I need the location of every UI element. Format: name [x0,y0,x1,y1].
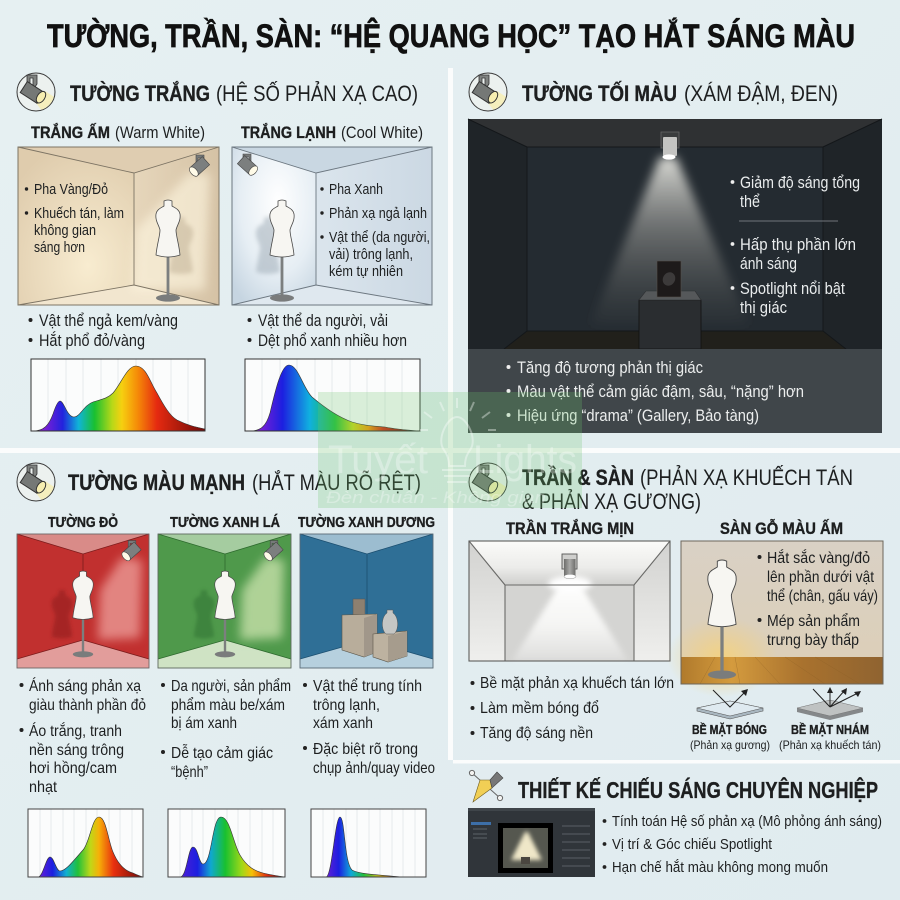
text: cool notes: Dệt phổ xanh nhiều hơn [258,331,407,350]
text: lighting design notes: Hạn chế hắt màu không mong muốn [612,859,828,876]
heading: strong coloured walls: TƯỜNG MÀU MẠNH [68,470,245,495]
chart: blue spectrum [311,809,426,877]
room: wood floor [667,541,883,697]
room: warm white: Pha Vàng/Đỏ [34,181,108,198]
room: warm white: không gian [34,222,96,239]
text: cool notes [248,311,407,350]
watermark [318,392,582,508]
text: warm notes: Vật thể ngả kem/vàng [39,311,178,330]
room: wood floor: Mép sản phẩm [767,612,860,630]
text: lighting design notes [603,813,882,876]
text: blue wall notes: chụp ảnh/quay video [313,760,435,777]
text: warm notes [28,311,178,350]
label: rough surface [779,722,881,752]
text: red wall notes: giàu thành phần đỏ [29,697,146,714]
text: blue wall notes: trông lạnh, [313,697,380,714]
panel: professional lighting design [468,770,882,877]
text: ceiling notes [470,675,674,742]
heading: ceiling and floor: TRẦN & SÀN [522,465,634,490]
chart: cool white spectrum [245,359,420,431]
text: ceiling notes: Bề mặt phản xạ khuếch tán lớn [480,675,674,692]
text: green wall notes: phẩm màu be/xám [171,696,285,714]
label: glossy surface: BỀ MẶT BÓNG [692,722,767,737]
icon: track spotlight [469,73,511,116]
subheading: blue: TƯỜNG XANH DƯƠNG [298,513,435,531]
heading: dark walls: TƯỜNG TỐI MÀU [522,80,677,106]
label: glossy surface [690,722,770,752]
heading: ceiling and floor: & PHẢN XẠ GƯƠNG) [522,489,701,514]
subheading: warm white: TRẮNG ẤM [31,123,110,142]
heading: white walls: (HỆ SỐ PHẢN XẠ CAO) [216,80,418,106]
caption band: Tăng độ tương phản thị giác [517,358,703,377]
room: blue [300,534,433,668]
room: wood floor: lên phần dưới vật [767,569,874,586]
text: red wall notes: nền sáng trông [29,742,124,759]
subheading: cool white [241,123,423,142]
icon: track spotlight [469,463,511,506]
room: warm white [18,147,219,305]
chart: green spectrum [168,809,285,877]
text: blue wall notes [303,677,435,777]
text: dark room notes: ánh sáng [740,254,797,273]
text: ceiling notes: Làm mềm bóng đổ [480,699,599,717]
room: wood floor: thể (chân, gấu váy) [767,587,878,605]
text: blue wall notes: Đặc biệt rõ trong [313,741,418,758]
text: warm notes: Hắt phổ đỏ/vàng [39,331,145,350]
icon: lighting tool [469,770,503,802]
watermark: Lights [473,438,577,482]
text: blue wall notes: Vật thể trung tính [313,677,422,695]
text: dark room notes: thị giác [740,298,787,317]
room: wood floor: trưng bày thấp [767,632,859,649]
room: green [158,534,291,668]
text: red wall notes [20,676,146,796]
text: lighting design notes: Vị trí & Góc chiếu Spotlight [612,836,773,853]
label: rough surface: (Phản xạ khuếch tán) [779,738,881,752]
text: green wall notes: Da người, sản phẩm [171,677,291,695]
text: red wall notes: Áo trắng, tranh [29,721,122,740]
subheading: green: TƯỜNG XANH LÁ [170,513,280,531]
room: dark gallery [468,119,882,433]
watermark: Tuyết [328,438,428,482]
room: red [17,534,149,668]
room: warm white: sáng hơn [34,239,85,256]
text: dark room notes [731,173,860,317]
heading: ceiling and floor: (PHẢN XẠ KHUẾCH TÁN [640,465,853,490]
icon: rough surface reflection [797,687,863,720]
subheading: cool white: (Cool White) [341,123,423,142]
text: red wall notes: Ánh sáng phản xạ [29,676,141,695]
watermark: Đèn chuẩn - Không gian [326,488,546,507]
label: rough surface: BỀ MẶT NHÁM [791,722,869,737]
icon: glossy surface reflection [697,689,763,719]
subheading: smooth white ceiling: TRẦN TRẮNG MỊN [506,519,634,538]
text: green wall notes: Dễ tạo cảm giác [171,743,273,762]
text: green wall notes: “bệnh” [171,764,208,781]
room: cool white: vải) trông lạnh, [329,246,413,263]
icon: track spotlight [17,463,59,506]
subheading: warm white [31,123,205,142]
heading: dark walls [522,80,838,106]
heading: white walls: TƯỜNG TRẮNG [70,81,210,106]
heading: strong coloured walls: (HẮT MÀU RÕ RỆT) [252,470,421,495]
room: warm white: Khuếch tán, làm [34,205,124,222]
room: cool white: Phản xạ ngả lạnh [329,205,427,222]
text: blue wall notes: xám xanh [313,715,373,732]
chart: red spectrum [28,809,143,877]
caption band: Hiệu ứng “drama” (Gallery, Bảo tàng) [517,406,759,425]
subheading: warm white: (Warm White) [115,123,205,142]
panel dividers [0,68,900,764]
panel: dark walls [468,73,882,433]
text: dark room notes: Hấp thụ phần lớn [740,235,856,254]
heading: strong coloured walls [68,470,421,495]
room: wood floor: Hắt sắc vàng/đỏ [767,548,870,567]
caption band: Màu vật thể cảm giác đậm, sâu, “nặng” hơn [517,382,804,401]
heading: ceiling and floor [522,465,853,514]
caption band [468,349,882,433]
subheading: red: TƯỜNG ĐỎ [48,513,118,531]
text: dark room notes: Giảm độ sáng tổng [740,173,860,192]
text: red wall notes: nhạt [29,779,57,796]
room: cool white [232,147,432,305]
panel: ceiling and floor [469,463,883,752]
text: dark room notes: thể [740,192,760,211]
panel: white walls [17,73,432,431]
room: cool white: Vật thể (da người, [329,229,430,246]
room: cool white: kém tự nhiên [329,263,403,280]
simulation software screenshot [468,808,595,877]
panel: strong coloured walls [17,463,435,877]
heading: white walls [70,80,418,106]
icon: track spotlight [17,73,59,116]
text: red wall notes: hơi hồng/cam [29,760,117,777]
subheading: cool white: TRẮNG LẠNH [241,123,336,142]
subheading: warm wood floor: SÀN GỖ MÀU ẤM [720,519,843,538]
text: green wall notes: bị ám xanh [171,715,237,732]
text: dark room notes: Spotlight nổi bật [740,279,845,298]
heading: dark walls: (XÁM ĐẬM, ĐEN) [684,81,838,106]
label: glossy surface: (Phản xạ gương) [690,738,770,752]
text: ceiling notes: Tăng độ sáng nền [480,725,593,742]
room: cool white: Pha Xanh [329,181,383,198]
chart: warm white spectrum [31,359,205,431]
text: green wall notes [161,677,291,781]
text: cool notes: Vật thể da người, vải [258,311,388,330]
room: white ceiling [469,541,670,661]
